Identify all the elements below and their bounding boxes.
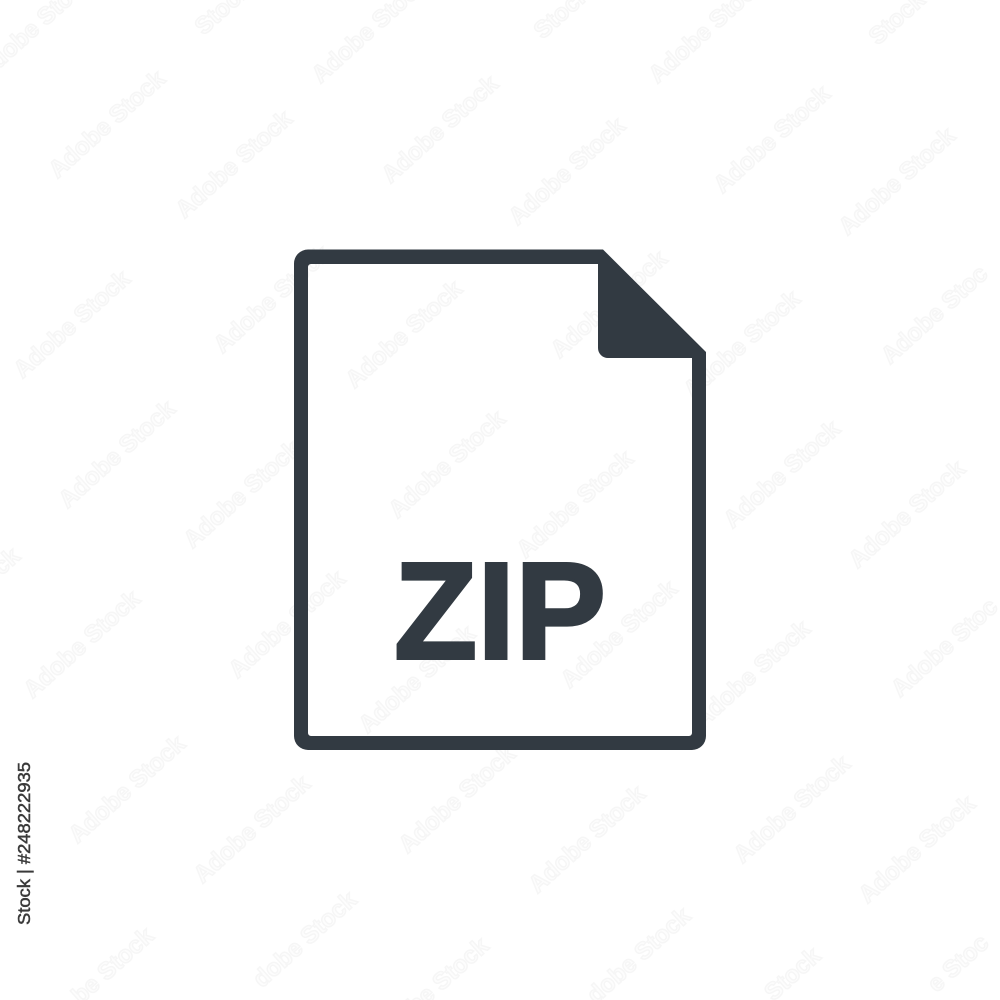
label: ZIP: ZIP — [394, 534, 606, 688]
watermark: repeated faint Adobe Stock text: Adobe Stoc — [886, 593, 1000, 702]
watermark: repeated faint Adobe Stock text: Adobe Stock — [8, 265, 136, 384]
watermark: repeated faint Adobe Stock text: Adobe Stock — [523, 780, 651, 899]
watermark: repeated faint Adobe Stock text: Adobe Stoc — [876, 260, 993, 369]
icon: ZIP document — [294, 250, 706, 750]
watermark: repeated faint Adobe Stock text: Adobe Stock — [688, 615, 816, 734]
watermark: repeated faint Adobe Stock text: Adobe Stock — [843, 455, 971, 574]
watermark: repeated faint Adobe Stock text: dobe Stock — [248, 886, 362, 993]
watermark: repeated faint Adobe Stock text: Adobe Stock — [393, 740, 521, 859]
watermark: repeated faint Adobe Stock text: Adobe Stock — [503, 112, 631, 231]
watermark: repeated faint Adobe Stock text: Adobe Stock — [718, 415, 846, 534]
watermark: repeated faint Adobe Stock text: Adobe Stock — [678, 285, 806, 404]
icon: page outline with folded corner — [294, 250, 706, 750]
watermark: repeated faint Adobe Stock text: Adobe Stock — [728, 750, 856, 869]
watermark: repeated faint Adobe Stock text: Adobe Stock — [708, 80, 836, 199]
watermark: repeated faint Adobe Stock text: Adobe Stock — [188, 770, 316, 889]
watermark: repeated faint Adobe Stock text: Adobe Stock — [43, 65, 171, 184]
watermark: repeated faint Adobe Stock text: Adobe Stock — [208, 240, 336, 359]
watermark: repeated faint Adobe Stock text: Adobe Stock — [223, 565, 351, 684]
watermark: repeated faint Adobe Stock text: Adobe Stock — [353, 620, 481, 739]
watermark: repeated faint Adobe Stock text: Adobe Stock — [178, 435, 306, 554]
watermark: repeated faint Adobe Stock text: Adobe Stock — [376, 70, 504, 189]
watermark: repeated faint Adobe Stock text: Adobe Stock — [383, 405, 511, 524]
watermark: repeated faint Adobe Stock text: Adobe Stock — [170, 105, 298, 224]
watermark: repeated faint Adobe Stock text: Adobe Stock — [340, 275, 468, 394]
watermark: repeated faint Adobe Stock text: Adobe Stock — [63, 730, 191, 849]
watermark: repeated faint Adobe Stock text: Adobe Stock — [53, 395, 181, 514]
watermark: repeated faint Adobe Stock text: Adobe Stock — [18, 585, 146, 704]
watermark: repeated faint Adobe Stock text: e Stoc — [922, 929, 994, 998]
watermark: repeated faint Adobe Stock text: Adobe Stock — [545, 245, 673, 364]
watermark: repeated faint Adobe Stock text: Adobe Stock — [853, 790, 981, 909]
watermark: repeated faint Adobe Stock text: Adobe Stock — [833, 122, 961, 241]
watermark: repeated faint Adobe Stock text: Adobe Stock — [511, 445, 639, 564]
credit: stock number: Stock | #248222935 — [14, 762, 34, 925]
watermark: repeated faint Adobe Stock text: Adobe Stock — [555, 575, 683, 694]
